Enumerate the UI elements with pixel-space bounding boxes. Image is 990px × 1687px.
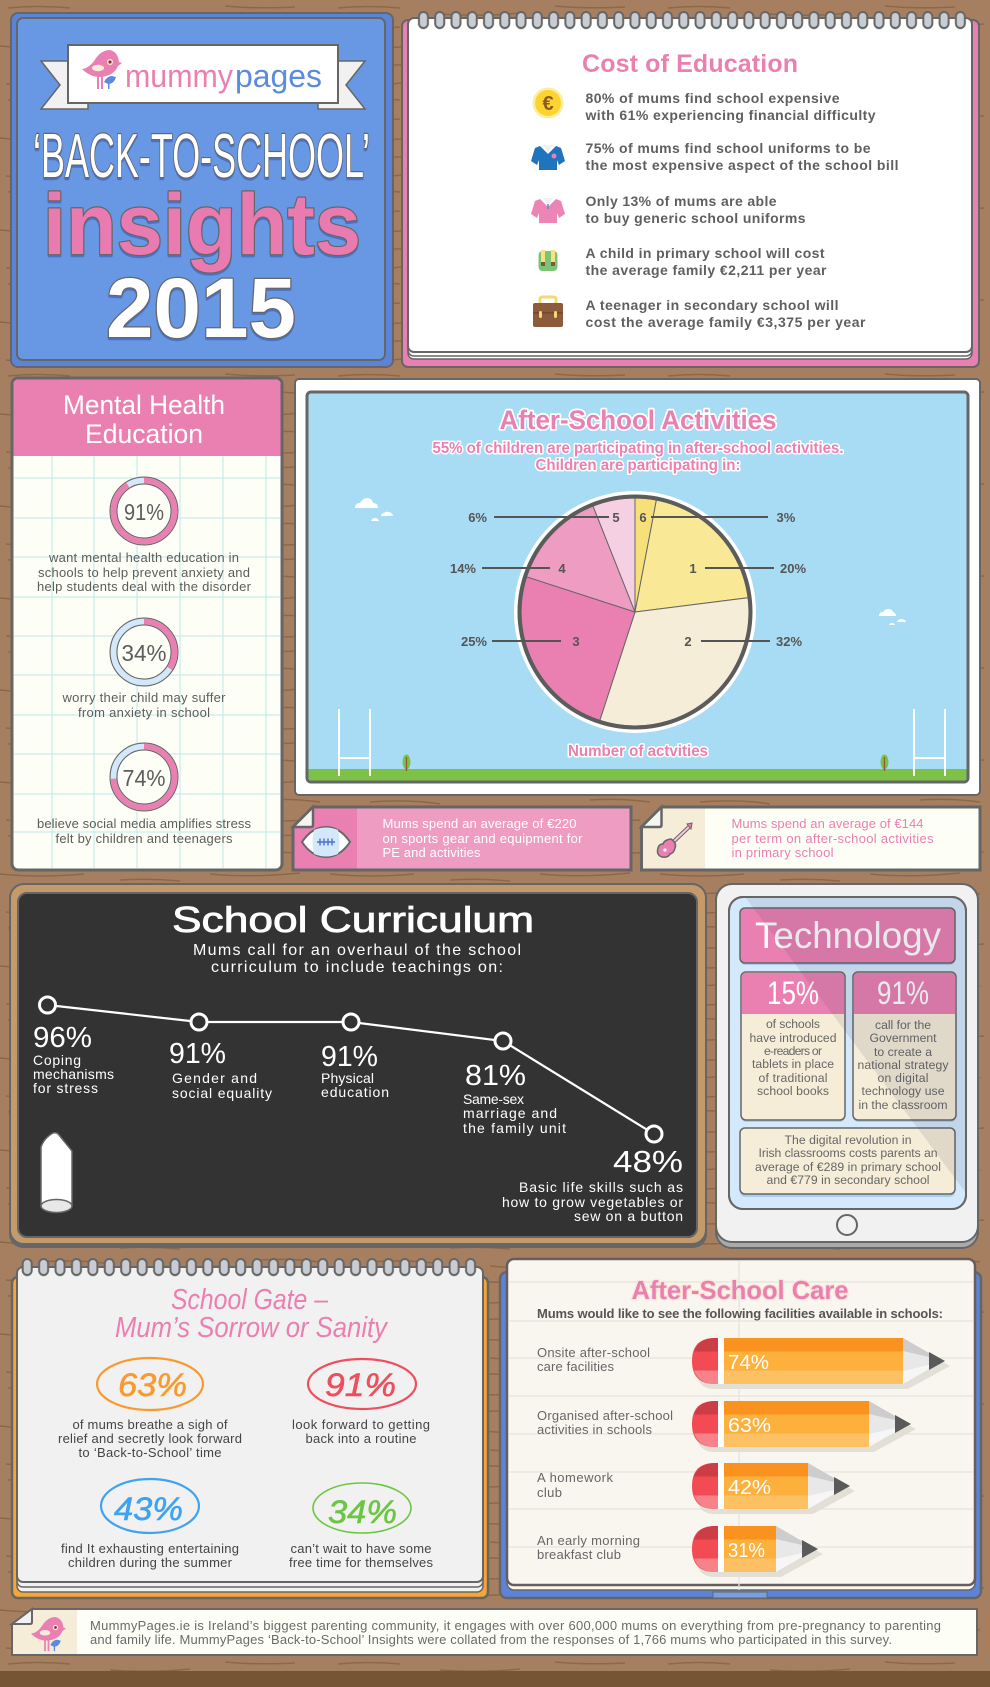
panel: mental health education <box>12 378 282 870</box>
logo wordmark: pages <box>235 58 322 94</box>
pie chart <box>450 491 806 733</box>
text: expensive: with 61% experiencing financial difficulty <box>584 107 876 123</box>
pie labels: 14% <box>450 561 476 576</box>
panel: cost of education <box>402 10 979 367</box>
stat: 15 percent: of schools <box>766 1017 820 1031</box>
pie labels <box>450 510 806 649</box>
stat: 34 percent <box>289 1483 434 1570</box>
pencil 74 percent <box>692 1338 950 1389</box>
stat: 91 percent: schools to help prevent anxiety and <box>38 565 250 580</box>
stat: 91 percent physical: education <box>321 1084 389 1100</box>
stat: 96 percent: Coping <box>33 1052 81 1068</box>
stat: 81 percent: marriage and <box>463 1105 557 1121</box>
text: MummyPages.ie is Ireland’s biggest parenting community, it engages with over 600,000 mums on everything from pre-pregnancy to parenting <box>90 1618 941 1633</box>
row: onsite care <box>537 1338 950 1389</box>
pencil 31 percent: 31% <box>728 1540 765 1562</box>
icon: clouds left <box>355 498 393 521</box>
subheading: 55% of children are participating in after-school activities. <box>432 440 844 457</box>
text: Mums spend an average of €220 <box>382 816 576 831</box>
pie labels: 6% <box>468 510 487 525</box>
heading: Cost of Education <box>582 50 798 78</box>
stat: 74 percent: believe social media amplifies stress <box>37 816 252 831</box>
stat: 91 percent <box>37 480 252 594</box>
pencil 42 percent <box>692 1463 855 1514</box>
pencil 74 percent: 74% <box>728 1352 769 1374</box>
text: secondary school <box>586 297 866 330</box>
stat: 15 percent: e-readers or <box>764 1044 822 1058</box>
panel: after-school activities <box>295 379 980 795</box>
text <box>90 1618 941 1647</box>
text: PE and activities <box>382 845 481 860</box>
logo wordmark <box>125 58 322 94</box>
stat: 91 percent technology: call for the <box>875 1018 931 1032</box>
text: on sports gear and equipment for <box>382 831 583 846</box>
stat: 43 percent: 43% <box>114 1491 183 1527</box>
stat: 91 percent technology <box>853 972 956 1122</box>
stat: 96 percent: mechanisms <box>33 1066 114 1082</box>
row: homework club: club <box>537 1485 562 1500</box>
text: primary school: A child in primary school will cost <box>586 245 825 261</box>
heading: year: 2015 <box>106 261 296 355</box>
text: uniforms <box>586 140 898 173</box>
stat: 15 percent: school books <box>757 1084 829 1098</box>
row: breakfast club: breakfast club <box>537 1547 621 1562</box>
stat: 81 percent: the family unit <box>463 1120 566 1136</box>
stat: 63 percent: to ‘Back-to-School’ time <box>78 1445 222 1460</box>
icon: goal post left <box>339 709 370 776</box>
digital revolution note: The digital revolution in <box>784 1133 912 1147</box>
icon: guitar <box>658 823 692 857</box>
text: primary school <box>586 245 827 278</box>
stat: 48 percent: Basic life skills such as <box>519 1179 683 1195</box>
text: uniforms: the most expensive aspect of the school bill <box>586 157 898 173</box>
pie labels: 20% <box>780 561 806 576</box>
heading: After-School Activities <box>500 405 776 435</box>
text: Mums spend an average of €144 <box>732 816 924 831</box>
text: expensive <box>584 90 876 123</box>
heading: After-School Care <box>632 1275 848 1305</box>
row: homework club: A homework <box>537 1470 614 1485</box>
panel: title <box>11 13 393 367</box>
stat: 63 percent: relief and secretly look forward <box>58 1431 242 1446</box>
pie labels: 3 <box>572 634 580 649</box>
stat: 91 percent technology: national strategy <box>858 1058 949 1072</box>
stat: 91 percent technology: on digital <box>878 1071 928 1085</box>
digital revolution note: and €779 in secondary school <box>766 1173 930 1187</box>
stat: 15 percent: 15% <box>767 975 819 1011</box>
stat: 91 percent: 91% <box>124 499 164 525</box>
pie labels: 25% <box>461 634 487 649</box>
stat: 91 percent technology: technology use <box>862 1084 945 1098</box>
stat: 91 percent technology: 91% <box>877 975 929 1011</box>
technology header: Technology <box>755 915 941 956</box>
pencil 31 percent <box>692 1526 823 1577</box>
text <box>732 816 934 860</box>
stat: 81 percent: Same-sex <box>463 1091 524 1107</box>
icon: euro coin <box>532 88 564 118</box>
row: breakfast club <box>537 1526 823 1577</box>
stat: 48 percent: sew on a button <box>574 1208 683 1224</box>
pie labels: 4 <box>558 561 566 576</box>
stat: 63 percent <box>58 1358 242 1460</box>
pie labels: 2 <box>684 634 692 649</box>
row: organised activities: activities in schools <box>537 1422 652 1437</box>
icon: pink uniform <box>531 198 565 223</box>
heading: School Curriculum <box>172 899 534 940</box>
heading: insights: insights <box>43 177 361 273</box>
pie leader lines <box>482 517 774 641</box>
stat: 48 percent: how to grow vegetables or <box>502 1194 683 1210</box>
text: secondary school: A teenager in secondary school will <box>586 297 838 313</box>
text: uniforms: 75% of mums find school uniforms to be <box>586 140 871 156</box>
chart caption: Number of actvities <box>568 743 708 760</box>
pie labels: 1 <box>689 561 697 576</box>
text: secondary school: cost the average family €3,375 per year <box>586 314 866 330</box>
stat: 15 percent: tablets in place <box>752 1057 834 1071</box>
stat: 74 percent: felt by children and teenagers <box>56 831 233 846</box>
row: organised activities <box>537 1401 916 1452</box>
stat: 81 percent: 81% <box>465 1060 526 1092</box>
text: generic uniforms: Only 13% of mums are able <box>586 193 777 209</box>
digital revolution note: Irish classrooms costs parents an <box>758 1146 938 1160</box>
callout: sports gear <box>293 807 631 870</box>
text: and family life. MummyPages ‘Back-to-School’ Insights were collated from the responses of 1,766 mums who participated in this survey. <box>90 1632 892 1647</box>
pencil 63 percent <box>692 1401 916 1452</box>
stat: 81 percent <box>463 1060 566 1136</box>
icon: tree right <box>880 754 888 771</box>
stat: 15 percent <box>741 972 845 1122</box>
stat: 43 percent: children during the summer <box>68 1555 233 1570</box>
row: homework club <box>537 1463 855 1514</box>
callout: after-school spend <box>642 807 980 870</box>
stat: 96 percent <box>33 1022 114 1096</box>
stat: 34 percent: 34% <box>328 1494 397 1530</box>
heading: back-to-school: ‘BACK-TO-SCHOOL’ <box>33 122 370 191</box>
stat: 91 percent technology: to create a <box>874 1045 932 1059</box>
header: Mental Health <box>63 390 225 420</box>
stat: 43 percent: find It exhausting entertaining <box>61 1541 239 1556</box>
digital revolution note: average of €289 in primary school <box>755 1160 941 1174</box>
row: organised activities: Organised after-school <box>537 1408 673 1423</box>
panel: technology tablet <box>716 884 978 1248</box>
icon: blue uniform <box>531 145 565 170</box>
stat: 34 percent: free time for themselves <box>289 1555 434 1570</box>
text <box>382 816 583 860</box>
stat: 74 percent: 74% <box>122 765 166 791</box>
stat: 91 percent: help students deal with the disorder <box>37 579 252 594</box>
icon: tree left <box>402 754 410 771</box>
panel: school curriculum chalkboard <box>9 884 707 1248</box>
subheading: Mums call for an overhaul of the school <box>193 942 521 959</box>
stat: 91 percent technology: Government <box>870 1031 937 1045</box>
stat: 91 percent gender: Gender and <box>172 1070 257 1086</box>
stat: 91 percent physical: 91% <box>321 1041 378 1073</box>
stat: 91 percent gender: social equality <box>172 1085 272 1101</box>
stat: 91 percent technology: in the classroom <box>858 1098 948 1112</box>
logo wordmark: mummy <box>125 58 233 94</box>
row: onsite care: care facilities <box>537 1359 614 1374</box>
subheading: curriculum to include teachings on: <box>211 959 503 976</box>
text: expensive: 80% of mums find school expensive <box>586 90 840 106</box>
pie labels: 3% <box>776 510 796 525</box>
icon: goal post right <box>914 709 945 776</box>
subheading <box>193 942 521 976</box>
stat: 15 percent: of traditional <box>758 1071 828 1085</box>
digital revolution note <box>740 1128 955 1197</box>
stat: 91 percent routine <box>292 1359 430 1446</box>
icon: footer bird <box>31 1617 66 1651</box>
icon: euro coin: € <box>542 93 554 115</box>
heading: School Gate – <box>171 1284 329 1316</box>
pencil 42 percent: 42% <box>728 1477 771 1499</box>
stat: 48 percent <box>502 1144 683 1224</box>
icon: football <box>302 827 350 857</box>
icon: chalk stick <box>41 1133 72 1212</box>
pencil 63 percent: 63% <box>728 1415 771 1437</box>
header <box>14 380 280 456</box>
stat: 48 percent: 48% <box>613 1144 683 1179</box>
text: in primary school <box>732 845 834 860</box>
stat: 34 percent <box>62 622 226 720</box>
icon: school bag <box>538 250 558 271</box>
stat: 91 percent: want mental health education in <box>48 550 239 565</box>
icon: logo bird <box>82 50 122 89</box>
text: generic uniforms: to buy generic school uniforms <box>586 210 806 226</box>
stat: 91 percent physical: Physical <box>321 1070 374 1086</box>
stat: 43 percent <box>61 1479 239 1570</box>
text: primary school: the average family €2,211 per year <box>586 262 827 278</box>
pie labels: 6 <box>639 510 647 525</box>
pie labels: 5 <box>612 510 620 525</box>
stat: 34 percent: worry their child may suffer <box>62 690 226 705</box>
stat: 34 percent: 34% <box>122 640 166 666</box>
subheading <box>432 440 844 474</box>
stat: 96 percent: 96% <box>33 1022 92 1054</box>
header: Education <box>85 419 203 449</box>
row: onsite care: Onsite after-school <box>537 1345 650 1360</box>
stat: 91 percent gender: 91% <box>169 1038 226 1070</box>
stat: 63 percent: of mums breathe a sigh of <box>72 1417 228 1432</box>
logo ribbon <box>41 45 365 109</box>
ground <box>308 769 966 780</box>
stat: 91 percent routine: look forward to getting <box>292 1417 430 1432</box>
line chart <box>40 997 662 1142</box>
icon: home button <box>837 1215 857 1235</box>
stat: 96 percent: for stress <box>33 1080 98 1096</box>
heading <box>115 1284 388 1344</box>
text: per term on after-school activities <box>732 831 934 846</box>
heading: Mum’s Sorrow or Sanity <box>115 1312 388 1344</box>
subheading: Children are participating in: <box>536 457 740 474</box>
pie labels: 32% <box>776 634 802 649</box>
text: generic uniforms <box>586 193 806 226</box>
stat: 91 percent gender <box>169 1038 272 1101</box>
panel: after-school care <box>500 1259 981 1598</box>
subheading: Mums would like to see the following facilities available in schools: <box>537 1306 943 1321</box>
stat: 15 percent: have introduced <box>750 1031 836 1045</box>
panel: school gate notebook <box>12 1257 488 1598</box>
stat: 34 percent: can’t wait to have some <box>290 1541 432 1556</box>
icon: clouds right <box>879 609 906 625</box>
icon: briefcase <box>533 297 563 327</box>
row: breakfast club: An early morning <box>537 1533 640 1548</box>
stat: 34 percent: from anxiety in school <box>78 705 210 720</box>
stat: 74 percent <box>37 746 252 846</box>
stat: 91 percent physical <box>321 1041 389 1100</box>
technology header <box>740 908 955 965</box>
stat: 91 percent routine: 91% <box>325 1367 396 1403</box>
stat: 63 percent: 63% <box>118 1367 187 1403</box>
stat: 91 percent routine: back into a routine <box>306 1431 416 1446</box>
panel: footer about note <box>12 1609 977 1655</box>
